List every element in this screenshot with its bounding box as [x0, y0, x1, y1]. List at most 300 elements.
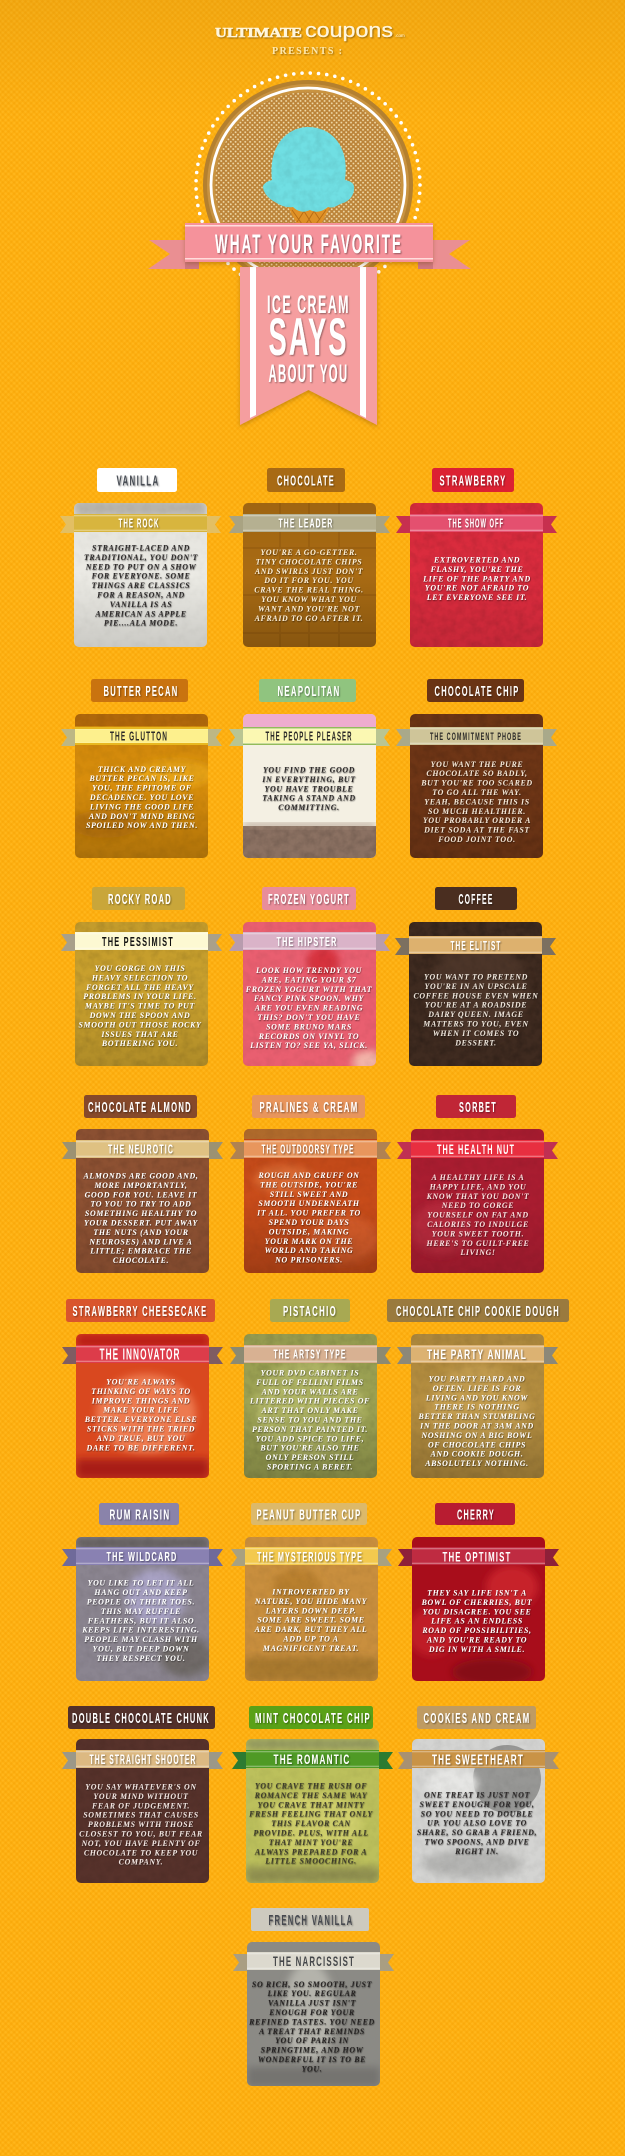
label: Pistachio: PISTACHIO	[283, 1303, 337, 1320]
description: FOR EVERYONE. SOME	[92, 572, 190, 581]
flavor: Double Chocolate Chunk	[62, 1706, 223, 1883]
presents line: PRESENTS :	[272, 46, 342, 57]
flavor: Cookies and Cream	[398, 1706, 559, 1883]
description: THAT MINT YOU'RE	[269, 1838, 353, 1847]
description: YOU WANT THE PURE	[431, 760, 523, 769]
description: STRAIGHT-LACED AND	[92, 544, 190, 552]
label: French Vanilla: FRENCH VANILLA	[268, 1912, 354, 1929]
description: THE NUTS (AND YOUR	[93, 1228, 189, 1237]
ribbon: The Hipster	[229, 932, 390, 951]
description: PIE....ALA MODE.	[104, 619, 178, 628]
text: WHAT YOUR FAVORITE	[215, 229, 403, 259]
description: AND YOUR WALLS ARE	[261, 1387, 358, 1396]
description: SOMETHING HEALTHY TO	[85, 1209, 197, 1218]
description: OF CHOCOLATE CHIPS	[428, 1440, 526, 1449]
flavor: Coffee	[395, 887, 556, 1066]
description: GOOD FOR YOU. LEAVE IT	[85, 1190, 198, 1199]
label: Peanut Butter Cup: PEANUT BUTTER CUP	[256, 1506, 362, 1524]
ribbon: The Mysterious Type	[231, 1547, 392, 1566]
description: ROUGH AND GRUFF ON	[257, 1171, 360, 1180]
ribbon: The Hipster: THE HIPSTER	[276, 935, 338, 949]
description: CLOSEST TO YOU, BUT FEAR	[79, 1830, 203, 1838]
panel texture	[244, 1334, 377, 1478]
description: LIFE AS AN ENDLESS	[430, 1617, 523, 1626]
description: COMMITTING.	[278, 803, 340, 812]
description: DO IT FOR YOU. YOU	[263, 576, 354, 585]
label: Strawberry	[432, 468, 514, 492]
ribbon: The Artsy Type	[230, 1345, 391, 1364]
description: THE OUTSIDE, YOU'RE	[260, 1180, 358, 1189]
description: DESSERT.	[454, 1038, 497, 1047]
description: YOUR MIND WITHOUT	[93, 1792, 189, 1801]
ribbon: The Rock	[60, 514, 221, 533]
flavor: Strawberry	[396, 468, 557, 647]
label: Butter Pecan: BUTTER PECAN	[104, 683, 178, 700]
ribbon: The Show Off: THE SHOW OFF	[448, 516, 504, 530]
description: AND YOU'RE READY TO	[426, 1636, 527, 1644]
flavor: Chocolate	[229, 468, 390, 647]
description: AMERICAN AS APPLE	[94, 609, 187, 618]
ribbon: The Mysterious Type: THE MYSTERIOUS TYPE	[257, 1548, 363, 1564]
label: Cookies and Cream	[417, 1706, 536, 1729]
panel texture	[243, 714, 376, 858]
panel texture	[411, 1129, 544, 1273]
description: COMPANY.	[119, 1858, 163, 1867]
panel texture	[76, 1129, 209, 1273]
flavor: Frozen Yogurt	[229, 887, 390, 1074]
flavor: Pistachio	[230, 1299, 391, 1478]
description: WONDERFUL IT IS TO BE	[258, 2055, 366, 2064]
description: YOU OF PARIS IN	[275, 2036, 349, 2045]
ribbon: The Narcissist: THE NARCISSIST	[273, 1953, 355, 1969]
ribbon: The Innovator: THE INNOVATOR	[100, 1346, 181, 1364]
description: SHARE, SO GRAB A FRIEND,	[417, 1828, 537, 1837]
description: IT ALL. YOU PREFER TO	[256, 1209, 361, 1218]
flavor: Pralines & Cream	[230, 1095, 391, 1273]
description: STICKS WITH THE TRIED	[87, 1424, 195, 1434]
description: THINGS ARE CLASSICS	[92, 581, 190, 590]
description: YOU'RE ALWAYS	[106, 1378, 176, 1386]
description: YOU PROBABLY ORDER A	[423, 816, 531, 825]
description: NATURE, YOU HIDE MANY	[254, 1597, 368, 1606]
label: Mint Chocolate Chip	[249, 1706, 373, 1729]
description: ALWAYS PREPARED FOR A	[254, 1847, 367, 1856]
description: YOU ADD SPICE TO LIFE,	[256, 1434, 364, 1443]
description: MAYBE IT'S TIME TO PUT	[84, 1002, 195, 1011]
ribbon: The Straight Shooter: THE STRAIGHT SHOOTER	[90, 1752, 196, 1767]
ribbon: The People Pleaser: THE PEOPLE PLEASER	[266, 730, 352, 744]
description: SOME BRUNO MARS	[266, 1022, 352, 1031]
description: SPORTING A BERET.	[267, 1462, 353, 1472]
label: Rocky Road	[92, 887, 185, 910]
description: THIS FLAVOR CAN	[271, 1819, 351, 1828]
panel texture	[243, 922, 376, 1066]
ribbon: The Romantic: THE ROMANTIC	[274, 1751, 350, 1767]
description: FEAR OF JUDGEMENT.	[92, 1801, 190, 1810]
description: MATTERS TO YOU, EVEN	[422, 1020, 529, 1028]
description: HANG OUT AND KEEP	[93, 1588, 188, 1597]
description: YOU LIKE TO LET IT ALL	[88, 1579, 194, 1588]
flavor: Strawberry Cheesecake	[62, 1299, 223, 1479]
description: WANT AND YOU'RE NOT	[258, 604, 361, 613]
description: TINY CHOCOLATE CHIPS	[256, 557, 362, 566]
logo: Ultimate Coupons: .com	[395, 33, 405, 38]
ribbon: The People Pleaser	[229, 727, 390, 746]
panel texture	[410, 503, 543, 647]
ribbon: The Commitment Phobe: THE COMMITMENT PHOBE	[430, 731, 522, 743]
description: REFINED TASTES. YOU NEED	[248, 2017, 375, 2026]
description: YOUR MARK ON THE	[265, 1237, 353, 1246]
description: IMPROVE THINGS AND	[91, 1396, 190, 1405]
ribbon: The Romantic	[232, 1750, 393, 1769]
label: Rum Raisin	[99, 1503, 179, 1525]
description: FRESH FEELING THAT ONLY	[249, 1810, 373, 1819]
description: YEAH, BECAUSE THIS IS	[424, 797, 530, 806]
label: Double Chocolate Chunk	[68, 1706, 215, 1729]
label: Strawberry Cheesecake: STRAWBERRY CHEESECAKE	[72, 1303, 208, 1320]
flavor: Peanut Butter Cup	[231, 1503, 392, 1681]
description: BOWL OF CHERRIES, BUT	[421, 1598, 533, 1607]
label: Strawberry Cheesecake	[66, 1299, 215, 1322]
icon: waffle cone	[288, 207, 330, 226]
description: AND SWIRLS JUST DON'T	[254, 567, 364, 576]
label: French Vanilla	[251, 1908, 369, 1931]
description: HAPPY LIFE, AND YOU	[429, 1182, 527, 1191]
description: AND COOKIE DOUGH.	[430, 1450, 524, 1459]
description: FLASHY, YOU'RE THE	[431, 565, 523, 574]
label: Chocolate	[267, 468, 345, 492]
label: Neapolitan: NEAPOLITAN	[278, 683, 340, 700]
flavor: Mint Chocolate Chip	[232, 1706, 393, 1883]
ribbon tails	[148, 240, 471, 269]
description: CALORIES TO INDULGE	[427, 1220, 529, 1229]
label: Chocolate Almond: CHOCOLATE ALMOND	[88, 1099, 192, 1116]
label: Coffee	[435, 887, 517, 910]
description: VANILLA JUST ISN'T	[268, 1999, 357, 2008]
panel texture	[76, 1334, 209, 1479]
label: Chocolate: CHOCOLATE	[277, 472, 335, 490]
label: Chocolate Chip	[427, 679, 524, 702]
description: ALMONDS ARE GOOD AND,	[82, 1172, 198, 1180]
description: LIVING!	[459, 1248, 496, 1257]
label: Rocky Road: ROCKY ROAD	[108, 891, 172, 908]
description: SO YOU NEED TO DOUBLE	[421, 1809, 533, 1818]
description: FEATHERS, BUT IT ALSO	[88, 1616, 194, 1625]
panel texture	[408, 1537, 545, 1686]
description: ARE DARK, BUT THEY ALL	[254, 1625, 367, 1634]
ribbon: The Sweetheart	[398, 1750, 559, 1769]
description: SENSE TO YOU AND THE	[257, 1416, 363, 1424]
description: PEOPLE ON THEIR TOES.	[87, 1598, 195, 1606]
description: YOU FIND THE GOOD	[263, 766, 355, 774]
description: NOSHING ON A BIG BOWL	[421, 1431, 532, 1440]
description: FULL OF FELLINI FILMS	[256, 1378, 364, 1387]
ribbon: The Leader: THE LEADER	[278, 516, 334, 530]
description: LITTLE; EMBRACE THE	[89, 1247, 192, 1256]
description: YOU DISAGREE. YOU SEE	[423, 1607, 531, 1616]
description: YOU GORGE ON THIS	[95, 964, 185, 973]
description: ONE TREAT IS JUST NOT	[424, 1790, 530, 1800]
description: FANCY PINK SPOON. WHY	[254, 994, 365, 1003]
description: ARE, EATING YOUR $7	[261, 975, 357, 984]
label: Neapolitan	[259, 679, 356, 702]
description: RIGHT IN.	[454, 1847, 499, 1856]
description: YOU'RE AT A ROADSIDE	[425, 1001, 527, 1010]
ribbon: The Innovator	[62, 1345, 223, 1364]
description: CHOCOLATE TO KEEP YOU	[84, 1848, 199, 1857]
ribbon: The Outdoorsy Type	[230, 1140, 391, 1159]
ribbon: The Optimist: THE OPTIMIST	[442, 1548, 512, 1564]
description: IN THE DOOR AT 3AM AND	[419, 1422, 534, 1430]
description: KNOW THAT YOU DON'T	[426, 1192, 530, 1201]
ribbon: The Wildcard: THE WILDCARD	[106, 1550, 178, 1564]
description: SOME ARE SWEET. SOME	[257, 1616, 365, 1625]
description: YOU'RE IN AN UPSCALE	[424, 982, 528, 991]
label: Strawberry: STRAWBERRY	[440, 472, 506, 490]
ribbon: The Neurotic	[62, 1140, 223, 1159]
description: HEAVY SELECTION TO	[91, 973, 188, 982]
description: YOU, THE EPITOME OF	[92, 784, 192, 793]
ribbon: The Party Animal	[397, 1345, 558, 1364]
icon: scoop	[263, 127, 354, 212]
ribbon: The Straight Shooter	[62, 1750, 223, 1769]
label: Mint Chocolate Chip: MINT CHOCOLATE CHIP	[255, 1710, 371, 1727]
description: TWO SPOONS, AND DIVE	[425, 1838, 529, 1846]
panel texture	[75, 922, 208, 1066]
description: PROVIDE. PLUS, WITH ALL	[253, 1828, 369, 1838]
description: WORLD AND TAKING	[265, 1246, 353, 1255]
panel texture	[245, 1537, 378, 1681]
label: Pralines & Cream	[252, 1095, 365, 1118]
bottom title ribbon	[240, 267, 377, 425]
title text: ICE CREAM	[267, 291, 350, 319]
panel texture	[74, 499, 207, 647]
description: BOTHERING YOU.	[101, 1039, 178, 1048]
description: YOU CRAVE THAT MINTY	[257, 1800, 365, 1809]
flavor: Rum Raisin	[62, 1503, 223, 1681]
ribbon: The Elitist: THE ELITIST	[450, 939, 502, 953]
description: LAYERS DOWN DEEP.	[265, 1606, 356, 1615]
description: COFFEE HOUSE EVEN WHEN	[413, 991, 539, 1000]
description: SO RICH, SO SMOOTH, JUST	[252, 1980, 373, 1989]
description: LITTERED WITH PIECES OF	[249, 1397, 370, 1406]
description: MAKE YOUR LIFE	[102, 1406, 179, 1415]
description: YOU HAVE TROUBLE	[265, 784, 353, 793]
panel texture	[76, 1537, 212, 1681]
description: DAIRY QUEEN. IMAGE	[427, 1010, 524, 1019]
description: UP. YOU ALSO LOVE TO	[427, 1819, 527, 1828]
panel texture	[412, 1739, 545, 1883]
label: Chocolate Chip: CHOCOLATE CHIP	[434, 683, 520, 700]
description: FORGET ALL THE HEAVY	[86, 983, 194, 992]
description: THEY RESPECT YOU.	[96, 1654, 186, 1663]
description: LOOK HOW TRENDY YOU	[255, 966, 363, 975]
description: VANILLA IS AS	[110, 600, 172, 609]
description: YOUR DVD CABINET IS	[261, 1368, 359, 1378]
description: DOWN THE SPOON AND	[89, 1011, 190, 1020]
ribbon: The Pessimist	[61, 932, 222, 951]
description: YOU, BUT DEEP DOWN	[93, 1644, 189, 1654]
panel texture	[243, 503, 376, 647]
top title ribbon	[185, 223, 433, 262]
label: Frozen Yogurt: FROZEN YOGURT	[268, 891, 350, 908]
label: Rum Raisin: RUM RAISIN	[110, 1506, 170, 1524]
description: FOOD JOINT TOO.	[438, 835, 516, 844]
description: NOT, YOU HAVE PLENTY OF	[81, 1839, 201, 1848]
panel texture	[246, 1739, 379, 1883]
description: FROZEN YOGURT WITH THAT	[246, 985, 373, 994]
ribbon: The Party Animal: THE PARTY ANIMAL	[427, 1346, 527, 1362]
ribbon: The Elitist	[395, 936, 556, 955]
description: STILL SWEET AND	[270, 1190, 348, 1199]
description: ART THAT ONLY MAKE	[260, 1406, 359, 1415]
description: PROBLEMS IN YOUR LIFE.	[83, 992, 197, 1001]
flavor: Neapolitan	[229, 679, 390, 858]
description: ENOUGH FOR YOUR	[268, 2008, 355, 2017]
label: Peanut Butter Cup	[251, 1503, 367, 1525]
description: NO PRISONERS.	[274, 1256, 343, 1265]
description: KEEPS LIFE INTERESTING.	[81, 1626, 200, 1635]
description: YOU SAY WHATEVER'S ON	[85, 1782, 197, 1792]
ribbon: The Show Off	[396, 514, 557, 533]
description: SMOOTH OUT THOSE ROCKY	[78, 1020, 202, 1029]
description: DIG IN WITH A SMILE.	[428, 1645, 525, 1654]
description: ROAD OF POSSIBILITIES,	[421, 1626, 532, 1635]
ribbon: The Outdoorsy Type: THE OUTDOORSY TYPE	[262, 1142, 354, 1156]
description: THEY SAY LIFE ISN'T A	[427, 1588, 527, 1598]
flavor: Sorbet	[397, 1095, 558, 1273]
description: YOURSELF ON FAT AND	[427, 1211, 529, 1220]
description: AND DON'T MIND BEING	[88, 812, 195, 821]
flavor: Vanilla	[60, 468, 221, 647]
description: BUT YOU'RE TOO SCARED	[420, 779, 533, 788]
panel texture	[244, 1129, 379, 1273]
description: CRAVE THE REAL THING.	[254, 586, 364, 595]
description: MORE IMPORTANTLY,	[93, 1181, 188, 1190]
logo: Ultimate Coupons: ULTIMATE	[215, 26, 302, 41]
description: NEUROSES) AND LIVE A	[88, 1237, 193, 1246]
title text: SAYS	[268, 308, 348, 367]
ribbon: The Artsy Type: THE ARTSY TYPE	[274, 1348, 346, 1362]
label: Vanilla: VANILLA	[116, 472, 160, 490]
flavor: Rocky Road	[61, 887, 222, 1066]
description: THIS? DON'T YOU HAVE	[257, 1013, 361, 1022]
description: CHOCOLATE.	[113, 1256, 169, 1265]
label: Pralines & Cream: PRALINES & CREAM	[260, 1099, 358, 1116]
description: INTROVERTED BY	[271, 1588, 350, 1596]
badge: dotted circle with ice cream	[196, 73, 420, 297]
description: NEED TO GORGE	[441, 1201, 514, 1210]
description: THINKING OF WAYS TO	[91, 1387, 191, 1396]
description: YOU.	[302, 2064, 322, 2073]
description: THICK AND CREAMY	[98, 765, 187, 774]
label: Double Chocolate Chunk: DOUBLE CHOCOLATE CHUNK	[72, 1710, 210, 1727]
description: TO YOU TO TRY TO ADD	[90, 1200, 192, 1209]
label: Sorbet: SORBET	[459, 1099, 497, 1116]
panel texture	[409, 922, 542, 1066]
logo: Ultimate Coupons: coupons	[305, 20, 393, 42]
description: OFTEN. LIFE IS FOR	[433, 1384, 521, 1393]
ribbon: The Commitment Phobe	[396, 727, 557, 746]
ribbon: The Leader	[229, 514, 390, 533]
description: BUT YOU'RE ALSO THE	[259, 1444, 360, 1453]
flavor: Chocolate Almond	[62, 1095, 223, 1273]
description: YOUR SWEET TOOTH.	[432, 1229, 524, 1238]
title text	[215, 229, 403, 388]
label: Cherry	[435, 1503, 515, 1525]
description: TO GO ALL THE WAY.	[432, 788, 522, 797]
flavor: Chocolate Chip Cookie Dough	[387, 1299, 569, 1478]
label: Pistachio	[270, 1299, 350, 1322]
description: YOU PARTY HARD AND	[429, 1374, 525, 1384]
description: YOU WANT TO PRETEND	[424, 972, 528, 982]
description: YOU CRAVE THE RUSH OF	[255, 1782, 367, 1790]
description: YOUR DESSERT. PUT AWAY	[84, 1218, 198, 1228]
panel texture	[70, 714, 215, 858]
ribbon: The Rock: THE ROCK	[118, 516, 160, 530]
description: YOU'RE A GO-GETTER.	[260, 548, 358, 557]
ribbon: The Optimist	[398, 1547, 559, 1566]
logo: Ultimate Coupons	[215, 20, 405, 42]
ribbon: The Glutton: THE GLUTTON	[110, 730, 168, 744]
description: SPEND YOUR DAYS	[269, 1218, 349, 1227]
label: Cherry: CHERRY	[457, 1506, 495, 1524]
description: WHEN IT COMES TO	[433, 1029, 519, 1038]
label: Butter Pecan	[91, 679, 188, 702]
ribbon: The Narcissist	[233, 1952, 394, 1971]
description: ROMANCE THE SAME WAY	[254, 1791, 368, 1800]
description: LIVING AND YOU KNOW	[425, 1393, 528, 1402]
description: A TREAT THAT REMINDS	[258, 2027, 365, 2036]
panel texture	[411, 1334, 544, 1478]
description: IN EVERYTHING, BUT	[261, 775, 356, 784]
description: BETTER THAN STUMBLING	[418, 1412, 535, 1421]
description: THIS MAY RUFFLE	[101, 1607, 181, 1616]
description: ADD UP TO A	[282, 1634, 339, 1644]
description: TAKING A STAND AND	[262, 794, 356, 803]
description: DARE TO BE DIFFERENT.	[85, 1443, 196, 1452]
description: PROBLEMS WITH THOSE	[88, 1820, 194, 1829]
label: Coffee: COFFEE	[458, 891, 494, 908]
description: LIKE YOU. REGULAR	[267, 1989, 356, 1998]
label: Chocolate Almond	[84, 1095, 197, 1118]
description: EXTROVERTED AND	[433, 556, 520, 564]
description: PERSON THAT PAINTED IT.	[252, 1425, 368, 1434]
label: Vanilla	[97, 468, 177, 492]
description: ABSOLUTELY NOTHING.	[424, 1459, 529, 1468]
ribbon: The Neurotic: THE NEUROTIC	[108, 1142, 174, 1156]
ribbon: The Health Nut	[397, 1140, 558, 1159]
description: LIVING THE GOOD LIFE	[89, 802, 194, 811]
description: SMOOTH UNDERNEATH	[258, 1199, 360, 1208]
description: SPOILED NOW AND THEN.	[86, 821, 198, 830]
panel texture	[410, 714, 543, 858]
panel texture	[247, 1942, 380, 2087]
label: Frozen Yogurt	[262, 887, 356, 910]
description: LISTEN TO? SEE YA, SLICK.	[249, 1041, 368, 1050]
description: NEED TO PUT ON A SHOW	[85, 562, 197, 571]
description: DIET SODA AT THE FAST	[423, 826, 530, 835]
description: ARE YOU EVEN READING	[254, 1004, 363, 1013]
description: BUTTER PECAN IS, LIKE	[88, 774, 195, 783]
description: AND TRUE, BUT YOU	[96, 1434, 186, 1443]
label: Sorbet	[436, 1095, 516, 1118]
description: BETTER. EVERYONE ELSE	[84, 1415, 197, 1424]
ribbon: The Pessimist: THE PESSIMIST	[102, 935, 174, 949]
flavor: Chocolate Chip	[396, 679, 557, 858]
description: SWEET ENOUGH FOR YOU,	[420, 1800, 534, 1809]
description: HERE'S TO GUILT-FREE	[426, 1239, 529, 1248]
